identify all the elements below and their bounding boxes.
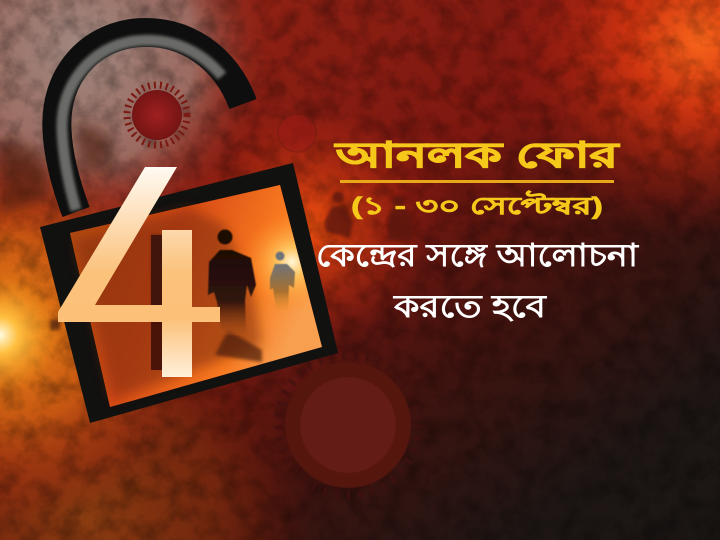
number 4 (50, 167, 220, 377)
silhouette: far figure (270, 252, 295, 310)
faint background silhouettes (324, 191, 412, 240)
padlock body (40, 163, 338, 423)
text: consult the centre line two: করতে হবে (393, 288, 547, 324)
title underline (340, 180, 614, 183)
virus: faint red (278, 114, 316, 152)
padlock (40, 32, 338, 423)
text: date range: (১ - ৩০ সেপ্টেম্বর) (351, 190, 603, 220)
virus: large at bottom (278, 355, 418, 495)
silhouette: near figure (208, 230, 256, 335)
virus: small dark red (127, 85, 187, 145)
text: Unlock Four title: আনলক ফোর (333, 136, 621, 175)
text: consult the centre line one: কেন্দ্রের সঙ্গে আলোচনা (316, 237, 640, 273)
padlock shackle (57, 32, 243, 212)
padlock window scene (70, 185, 322, 407)
